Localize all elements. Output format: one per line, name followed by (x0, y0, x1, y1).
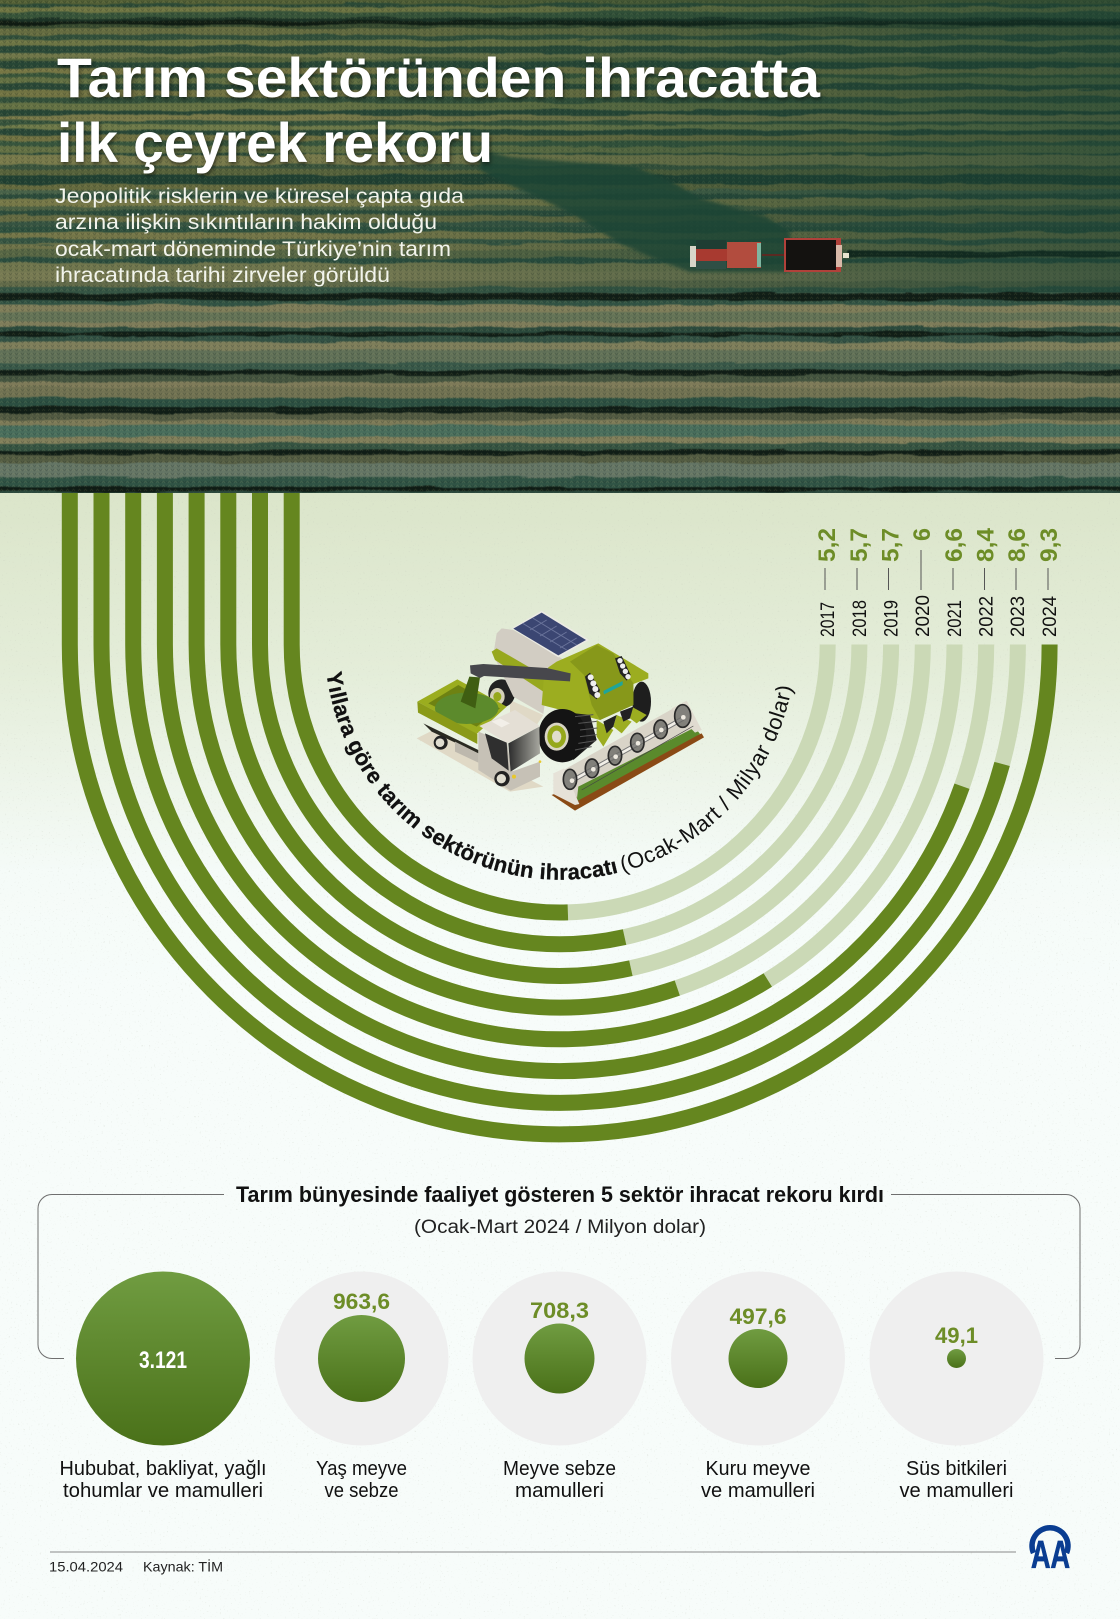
sector: fresh fruit and vegetables: ve sebze (324, 1480, 398, 1502)
year labels (818, 595, 1061, 637)
tractor and trailer (690, 238, 849, 272)
year values: 5,7 (878, 528, 904, 562)
year values: 5,2 (814, 528, 841, 562)
title (57, 46, 821, 174)
year labels: 2024 (1040, 596, 1061, 637)
sector: processed fruit and vegetables: Meyve sebze (503, 1458, 616, 1480)
bar 2019 (228, 493, 891, 976)
footer date and source: Kaynak: TİM (143, 1558, 223, 1574)
bar 2020 (197, 493, 923, 1008)
year labels: 2020 (913, 595, 934, 637)
sector: ornamental plants: ve mamulleri (900, 1480, 1014, 1502)
sectors heading: Tarım bünyesinde faaliyet gösteren 5 sektör ihracat rekoru kırdı (236, 1182, 884, 1207)
sector: ornamental plants: Süs bitkileri (906, 1458, 1007, 1480)
intro paragraph: arzına ilişkin sıkıntıların hakim olduğu (55, 211, 437, 234)
year labels: 2017 (818, 602, 839, 637)
sector: fresh fruit and vegetables: 963,6 (333, 1289, 390, 1314)
bar 2018 (260, 493, 859, 944)
sector: dried fruit: Kuru meyve (706, 1458, 810, 1480)
bar 2023 (101, 493, 1018, 1103)
footer rule (50, 1552, 1016, 1553)
intro paragraph: Jeopolitik risklerin ve küresel çapta gıda (55, 185, 464, 208)
bar 2024 (70, 493, 1050, 1134)
footer date and source: 15.04.2024 (49, 1558, 123, 1574)
year leader lines (825, 550, 1048, 590)
intro paragraph: ocak-mart döneminde Türkiye’nin tarım (55, 238, 451, 261)
bar 2021 (165, 493, 954, 1039)
sector: ornamental plants: 49,1 (935, 1323, 978, 1348)
radial bar chart: exports by year (70, 493, 1050, 1134)
sector: cereals: 3.121 (139, 1347, 187, 1374)
year labels: 2021 (945, 600, 966, 637)
sector: ornamental plants (870, 1272, 1044, 1502)
sector: processed fruit and vegetables: mamulleri (515, 1480, 604, 1502)
bar 2022 (133, 493, 986, 1071)
curved chart caption: (Ocak-Mart / Milyar dolar) (622, 686, 796, 875)
intro paragraph: ihracatında tarihi zirveler görüldü (55, 264, 390, 287)
sector: fresh fruit and vegetables (274, 1272, 448, 1502)
year values: 8,6 (1004, 528, 1031, 562)
footer date and source (49, 1558, 223, 1574)
sector: dried fruit (671, 1272, 845, 1502)
year labels: 2023 (1008, 596, 1029, 637)
sector: fresh fruit and vegetables: Yaş meyve (316, 1458, 407, 1480)
sectors panel (38, 1182, 1080, 1502)
sector: cereals (60, 1272, 266, 1502)
icon: harvester and truck illustration (417, 611, 704, 811)
header photo: ploughed field with tractor (0, 0, 1120, 499)
logo: AA: AA (1031, 1534, 1070, 1577)
sector: cereals: Hububat, bakliyat, yağlı (60, 1458, 266, 1480)
sector: processed fruit and vegetables (472, 1272, 646, 1502)
sector: processed fruit and vegetables: 708,3 (530, 1298, 589, 1323)
year labels: 2022 (976, 596, 998, 637)
sector: cereals: tohumlar ve mamulleri (63, 1480, 263, 1502)
year values: 9,3 (1036, 528, 1063, 562)
sectors subheading: (Ocak-Mart 2024 / Milyon dolar) (414, 1217, 706, 1238)
year values: 8,4 (972, 527, 1000, 562)
intro paragraph (55, 185, 464, 287)
panel frame (38, 1194, 1080, 1358)
curved chart caption (327, 670, 796, 880)
year values: 6,6 (941, 528, 968, 562)
title: Tarım sektöründen ihracatta (57, 46, 821, 109)
sector: dried fruit: 497,6 (730, 1304, 786, 1329)
year values: 6 (909, 528, 936, 541)
bar 2017 (292, 493, 828, 913)
title: ilk çeyrek rekoru (57, 111, 493, 174)
year labels: 2019 (882, 600, 902, 637)
year labels: 2018 (850, 600, 871, 637)
year values (814, 527, 1063, 562)
tractor shadow on the field (480, 150, 790, 272)
sector: dried fruit: ve mamulleri (701, 1480, 815, 1502)
curved chart caption: Yıllara göre tarım sektörünün ihracatı (327, 670, 618, 880)
year values: 5,7 (846, 528, 873, 562)
logo: AA (1031, 1528, 1070, 1577)
